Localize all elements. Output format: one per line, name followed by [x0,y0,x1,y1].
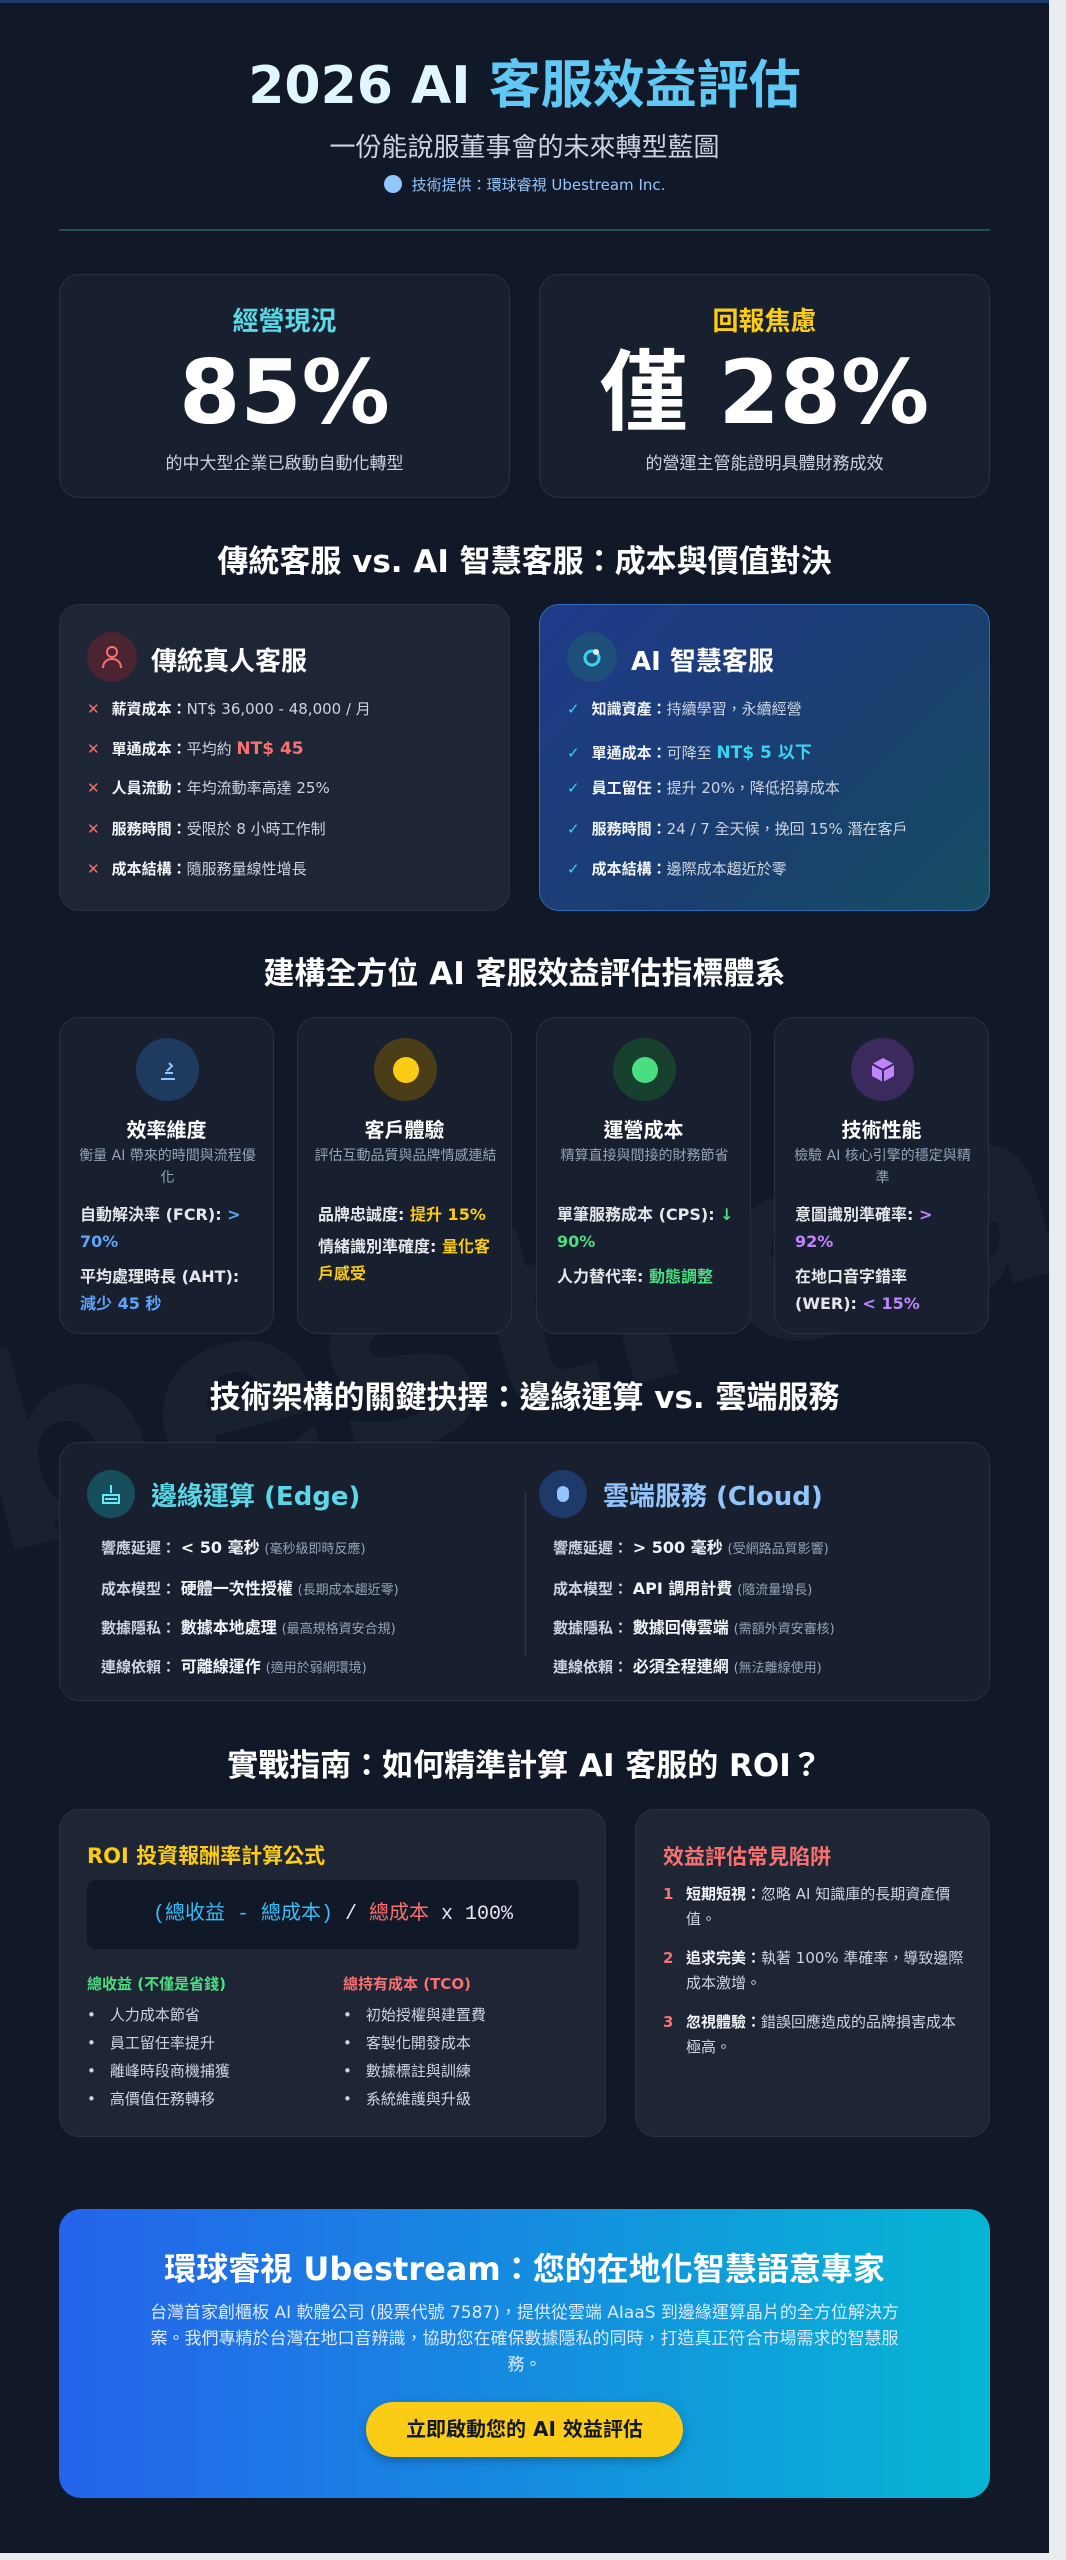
panel: pitfalls: 1 [663,1885,673,1903]
benefits list: 人力成本節省 [110,2006,200,2024]
panel: AI: ✓ 知識資產：持續學習，永續經營 [567,700,802,718]
metric card: 運營成本: 單筆服務成本 (CPS): ↓ 90% [557,1205,734,1251]
panel: AI: ✓ 員工留任：提升 20%，降低招募成本 [567,779,840,797]
cloud column: 數據隱私： 數據回傳雲端 (需額外資安審核) [553,1618,835,1637]
title: 2026 AI 客服效益評估 [248,56,801,116]
stat card: 回報焦慮 [539,274,990,498]
panel: traditional: ✕ 成本結構：隨服務量線性增長 [87,860,307,878]
metric card: 運營成本 [536,1017,751,1334]
icon: person [87,632,137,682]
metric card: 效率維度: 效率維度 [126,1118,206,1142]
CTA button: 立即啟動您的 AI 效益評估 [406,2417,643,2441]
panel: pitfalls: 3 [663,2013,673,2031]
metric card: 效率維度: 平均處理時長 (AHT): 減少 45 秒 [80,1267,239,1313]
metric card: 技術性能: 在地口音字錯率 (WER): < 15% [795,1267,920,1313]
subtitle: 一份能說服董事會的未來轉型藍圖 [329,133,720,163]
panel: traditional: ✕ 人員流動：年均流動率高達 25% [87,779,330,797]
cloud column: 雲端服務 (Cloud) [603,1482,823,1512]
costs list: 客製化開發成本 [366,2034,471,2052]
edge column: 數據隱私： 數據本地處理 (最高規格資安合規) [101,1618,396,1637]
panel: AI [539,604,990,911]
CTA panel: 環球睿視 Ubestream：您的在地化智慧語意專家 [164,2250,885,2288]
costs list: 總持有成本 (TCO) [343,1975,471,1993]
benefits list: 總收益 (不僅是省錢) [87,1975,226,1993]
stat card: 回報焦慮: 回報焦慮 [712,307,816,337]
panel: traditional: 傳統真人客服 [151,647,307,677]
metric card: 運營成本: 精算直接與間接的財務節省 [560,1148,728,1164]
formula box: (總收益 - 總成本) / 總成本 x 100% [153,1903,513,1926]
panel: AI: AI 智慧客服 [631,647,774,677]
heading: 成本與價值對決: 傳統客服 vs. AI 智慧客服：成本與價值對決 [217,544,832,580]
stat card: 回報焦慮: 的營運主管能證明具體財務成效 [646,454,884,474]
metric card: 效率維度: 衡量 AI 帶來的時間與流程優化 [79,1148,256,1186]
stat card: 經營現況: 經營現況 [232,307,336,337]
heading: 指標體系: 建構全方位 AI 客服效益評估指標體系 [263,956,786,992]
benefits list: 離峰時段商機捕獲 [110,2062,230,2080]
costs list: 系統維護與升級 [366,2090,471,2108]
metric card: 客戶體驗: 品牌忠誠度: 提升 15% [318,1205,486,1224]
edge column: 成本模型： 硬體一次性授權 (長期成本趨近零) [101,1579,399,1598]
edge column: 邊緣運算 (Edge) [151,1482,360,1512]
costs list: 初始授權與建置費 [366,2006,486,2024]
panel: AI: ✓ 成本結構：邊際成本趨近於零 [567,860,787,878]
edge column: 響應延遲： < 50 毫秒 (毫秒級即時反應) [101,1538,366,1557]
panel: pitfalls: 短期短視：忽略 AI 知識庫的長期資產價值。 [686,1885,950,1928]
panel: AI: ✓ 單通成本：可降至 NT$ 5 以下 [567,743,812,763]
stat card: 回報焦慮: 僅 28% [600,341,929,444]
metric card: 客戶體驗 [297,1017,512,1334]
metric card: 客戶體驗: 評估互動品質與品牌情感連結 [314,1148,496,1164]
metric card: 效率維度: 自動解決率 (FCR): > 70% [80,1205,241,1251]
heading: 邊緣 vs 雲端: 技術架構的關鍵抉擇：邊緣運算 vs. 雲端服務 [209,1380,840,1416]
cloud column: 連線依賴： 必須全程連網 (無法離線使用) [553,1657,822,1676]
metric card: 技術性能: 意圖識別準確率: > 92% [795,1205,932,1251]
metric card: 運營成本: 運營成本 [604,1118,684,1142]
benefits list: 員工留任率提升 [110,2034,215,2052]
edge column [87,1470,399,1676]
panel: edge vs cloud [59,1442,990,1701]
CTA button [366,2402,683,2457]
icon: AI [567,632,617,682]
formula box [87,1880,579,1949]
stat card: 經營現況 [59,274,510,498]
CTA panel: 台灣首家創櫃板 AI 軟體公司 (股票代號 7587)，提供從雲端 AIaaS 到邊緣運算晶片的全方位解決方案。我們專精於台灣在地口音辨識，協助您在確保數據隱私的同時，打造真正符合市場需求的智慧服務。 [150,2303,899,2375]
panel: traditional [59,604,510,911]
metric card: 技術性能: 檢驗 AI 核心引擎的穩定與精準 [794,1148,971,1186]
panel: pitfalls: 忽視體驗：錯誤回應造成的品牌損害成本極高。 [686,2013,956,2056]
panel: AI: ✓ 服務時間：24 / 7 全天候，挽回 15% 潛在客戶 [567,820,907,838]
panel: traditional: ✕ 服務時間：受限於 8 小時工作制 [87,820,326,838]
metric card: 效率維度 [59,1017,274,1334]
panel: traditional: ✕ 單通成本：平均約 NT$ 45 [87,739,304,759]
edge column: 連線依賴： 可離線運作 (適用於弱網環境) [101,1657,367,1676]
panel: pitfalls: 2 [663,1949,673,1967]
heading: ROI: 實戰指南：如何精準計算 AI 客服的 ROI？ [227,1748,822,1784]
stat card: 經營現況: 85% [179,341,390,444]
metric card: 客戶體驗: 情緒識別準確度: 量化客戶感受 [318,1237,490,1283]
cloud column: 成本模型： API 調用計費 (隨流量增長) [553,1579,812,1598]
costs list [343,1975,486,2108]
panel: pitfalls: 效益評估常見陷阱 [663,1845,831,1869]
benefits list: 高價值任務轉移 [110,2090,215,2108]
panel: traditional: ✕ 薪資成本：NT$ 36,000 - 48,000 / 月 [87,700,371,718]
metric card: 客戶體驗: 客戶體驗 [364,1118,444,1142]
metric card: 運營成本: 人力替代率: 動態調整 [557,1267,713,1286]
panel: pitfalls: 追求完美：執著 100% 準確率，導致邊際成本激增。 [686,1949,963,1992]
CTA panel [59,2209,990,2498]
credit line: 技術提供：環球睿視 Ubestream Inc. [412,176,665,194]
metric card: 技術性能: 技術性能 [842,1118,922,1142]
benefits list [87,1975,230,2108]
cloud column: 響應延遲： > 500 毫秒 (受網路品質影響) [553,1538,829,1557]
panel: ROI formula [59,1809,606,2137]
costs list: 數據標註與訓練 [366,2062,471,2080]
metric card: 技術性能 [774,1017,989,1334]
panel: pitfalls [635,1809,990,2137]
cloud column [539,1470,835,1676]
panel: ROI formula: ROI 投資報酬率計算公式 [87,1844,325,1868]
stat card: 經營現況: 的中大型企業已啟動自動化轉型 [166,454,404,474]
